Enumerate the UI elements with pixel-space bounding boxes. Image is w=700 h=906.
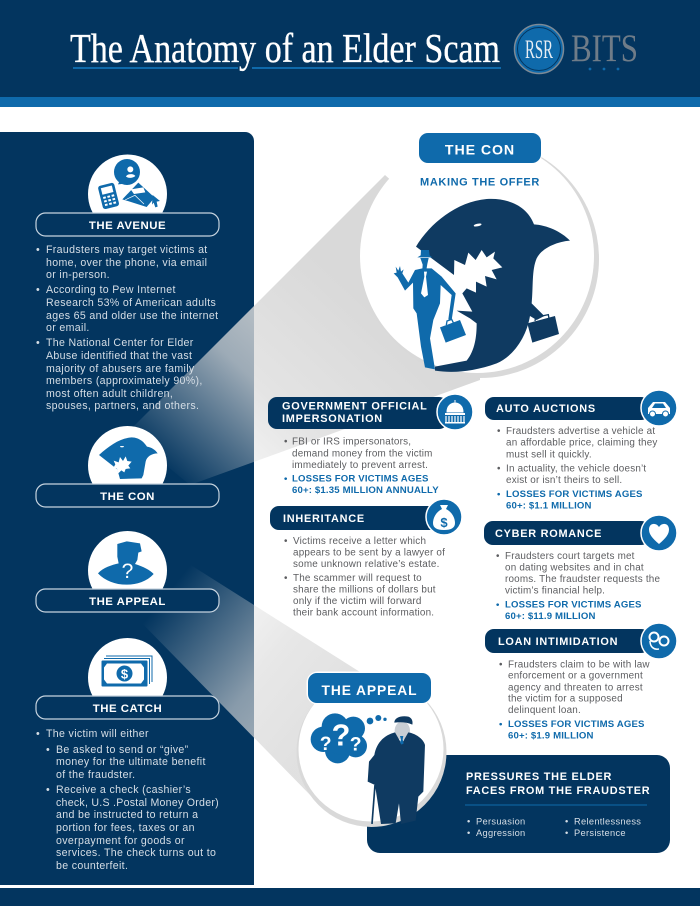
text: appears to be sent by a lawyer of [293, 548, 445, 558]
text: immediately to prevent arrest. [292, 460, 428, 471]
pill: the catch: THE CATCH [93, 703, 162, 715]
pill: the appeal: THE APPEAL [89, 596, 166, 608]
heading bar [270, 506, 440, 530]
text: Victims receive a letter which [293, 536, 426, 547]
icon: shark [88, 426, 167, 505]
subheading: MAKING THE OFFER [420, 176, 540, 188]
heading bar [268, 397, 448, 429]
text: • [496, 551, 500, 562]
text [284, 436, 439, 496]
heading bar [484, 521, 650, 545]
logo [514, 24, 638, 74]
text: avenue bullets: Abuse identified that the vast [46, 350, 192, 362]
pill: the con: THE CON [100, 491, 155, 503]
list [467, 816, 641, 838]
text: catch bullets: The victim will either [46, 728, 149, 740]
text: Fraudsters court targets met [505, 551, 635, 562]
heading bar: INHERITANCE [283, 513, 365, 525]
text: some unknown relative’s estate. [293, 559, 440, 570]
heading bar: LOAN INTIMIDATION [498, 636, 618, 648]
icon: money [88, 638, 167, 717]
heading bar: AUTO AUCTIONS [496, 403, 596, 415]
text: • [499, 719, 503, 730]
text: • [497, 489, 501, 500]
circle frame [360, 139, 599, 378]
text: avenue bullets: or email. [46, 322, 90, 334]
text: FBI or IRS impersonators, [292, 436, 411, 448]
heading bar: CYBER ROMANCE [495, 528, 602, 540]
text: • [284, 573, 288, 584]
heading bar [485, 629, 650, 653]
circle frame [296, 676, 446, 827]
text: 60+: $1.35 MILLION ANNUALLY [292, 485, 439, 496]
text [496, 551, 660, 622]
text: • [496, 600, 500, 610]
text [497, 426, 658, 512]
illustration: elder with thought cloud: ? [350, 735, 362, 756]
logo: BITS [571, 27, 638, 70]
left panel [0, 132, 254, 885]
card: auto auctions [485, 390, 677, 512]
illustration: elder with thought cloud: ? [332, 718, 350, 752]
icon: money: $ [121, 666, 129, 682]
logo: RSR [525, 35, 553, 64]
text: The scammer will request to [293, 573, 422, 584]
illustration: elder with thought cloud: ? [320, 734, 332, 755]
section: the appeal marker [36, 531, 219, 612]
text: LOSSES FOR VICTIMS AGES [508, 719, 645, 730]
heading [466, 771, 650, 797]
text: only if the victim will forward [293, 596, 422, 607]
icon: hidden figure: ? [122, 560, 133, 583]
text: 60+: $1.1 MILLION [506, 500, 592, 512]
text: avenue bullets: majority of abusers are family [46, 363, 195, 375]
text: avenue bullets: most often adult children, [46, 388, 173, 400]
text: share the millions of dollars but [293, 584, 436, 596]
list: • [467, 816, 471, 826]
text: their bank account information. [293, 608, 434, 618]
footer band [0, 888, 700, 906]
text: catch bullets: • [46, 784, 50, 796]
text: demand money from the victim [292, 448, 433, 460]
text: catch bullets: and be instructed to return a [56, 809, 198, 821]
text: • [284, 436, 288, 448]
text: • [284, 536, 288, 547]
icon: car [641, 390, 677, 426]
text: must sell it quickly. [506, 450, 592, 460]
list: Relentlessness [574, 816, 641, 826]
text: catch bullets: portion for fees, taxes or an [56, 822, 195, 834]
text: catch bullets: check, U.S .Postal Money Order) [56, 797, 219, 809]
text: agency and threaten to arrest [508, 682, 643, 694]
pill: the con [36, 484, 219, 507]
section: the con marker [36, 426, 219, 507]
text: In actuality, the vehicle doesn’t [506, 464, 646, 474]
text: delinquent loan. [508, 705, 581, 716]
text: avenue bullets: The National Center for Elder [46, 337, 194, 349]
card: inheritance [270, 499, 462, 618]
list: • [467, 828, 471, 838]
text: catch bullets: of the fraudster. [56, 769, 135, 781]
pill: the con heading [418, 132, 542, 164]
text: Fraudsters advertise a vehicle at [506, 426, 655, 437]
text: avenue bullets: Fraudsters may target victims at [46, 244, 208, 256]
beam: the con [127, 175, 480, 485]
icon: money bag [426, 499, 462, 535]
heading: FACES FROM THE FRAUDSTER [466, 785, 650, 797]
text: catch bullets: Be asked to send or “give” [56, 744, 189, 756]
text: an affordable price, claiming they [506, 438, 658, 448]
text: • [284, 474, 288, 484]
text: LOSSES FOR VICTIMS AGES [505, 600, 642, 610]
panel: the appeal illustration [296, 672, 446, 827]
icon: heart [641, 515, 677, 551]
title: The Anatomy of an Elder Scam [70, 25, 500, 71]
text: LOSSES FOR VICTIMS AGES [292, 474, 429, 484]
text: avenue bullets: According to Pew Internet [46, 284, 176, 296]
pill: the catch [36, 696, 219, 719]
panel: the con illustration [360, 132, 599, 378]
illustration: shark shadow and con man [394, 199, 570, 372]
text [499, 660, 650, 742]
text: catch bullets: • [46, 744, 50, 756]
heading bar: IMPERSONATION [282, 413, 383, 425]
text: 60+: $1.9 MILLION [508, 730, 594, 742]
text: avenue bullets: • [36, 337, 40, 349]
text [284, 536, 445, 618]
pill: the avenue: THE AVENUE [89, 220, 166, 232]
icon: handcuffs [641, 623, 677, 659]
beam: the appeal [132, 550, 370, 800]
text: avenue bullets: • [36, 284, 40, 296]
text: avenue bullets: Research 53% of American adults [46, 297, 216, 309]
text: the victim for a supposed [508, 694, 623, 704]
list: Persuasion [476, 816, 526, 826]
text: catch bullets: money for the ultimate benefit [56, 756, 206, 768]
list: • [565, 816, 569, 826]
list: Persistence [574, 828, 626, 838]
text: avenue bullets: home, over the phone, via email [46, 257, 207, 269]
icon: hidden figure [88, 531, 167, 610]
text: avenue bullets: spouses, partners, and others. [46, 400, 199, 412]
illustration: elder with thought cloud [311, 713, 425, 824]
panel: pressures [367, 755, 670, 853]
text: LOSSES FOR VICTIMS AGES [506, 489, 643, 500]
text: avenue bullets: • [36, 244, 40, 256]
card: cyber romance [484, 515, 677, 622]
pill: the con heading: THE CON [445, 142, 515, 158]
text: rooms. The fraudster requests the [505, 574, 660, 585]
text: exist or isn’t theirs to sell. [506, 475, 622, 486]
text: • [499, 660, 503, 670]
icon: avenue [88, 154, 167, 234]
text: avenue bullets: ages 65 and older use the internet [46, 310, 218, 322]
icon: money bag: $ [440, 515, 448, 530]
heading bar [485, 397, 650, 420]
pill: the appeal [36, 589, 219, 612]
pill: the avenue [36, 213, 219, 236]
pill: the appeal heading [306, 672, 432, 704]
text: • [497, 464, 501, 474]
text: avenue bullets: or in-person. [46, 269, 110, 281]
text: catch bullets [36, 728, 219, 872]
text: catch bullets: be counterfeit. [56, 860, 128, 872]
text: avenue bullets: members (approximately 90%), [46, 375, 203, 387]
text: catch bullets: services. The check turns out to [56, 847, 216, 859]
section: the catch [36, 638, 219, 872]
text: catch bullets: Receive a check (cashier’s [56, 784, 191, 796]
icon: capitol [437, 394, 473, 430]
text: catch bullets: • [36, 728, 40, 740]
text: on dating websites and in chat [505, 562, 644, 574]
pill: the appeal heading: THE APPEAL [322, 683, 417, 698]
text: avenue bullets [36, 244, 218, 412]
heading bar: GOVERNMENT OFFICIAL [282, 400, 428, 412]
text: 60+: $11.9 MILLION [505, 611, 596, 622]
text: catch bullets: overpayment for goods or [56, 835, 185, 847]
heading: PRESSURES THE ELDER [466, 771, 612, 783]
header band [0, 0, 700, 107]
card: loan intimidation [485, 623, 677, 742]
text: enforcement or a government [508, 670, 643, 682]
list: • [565, 828, 569, 838]
text: Fraudsters claim to be with law [508, 660, 650, 670]
section: the avenue [36, 154, 219, 412]
list: Aggression [476, 828, 526, 838]
text: • [497, 426, 501, 437]
text: victim’s financial help. [505, 586, 605, 596]
card: government official impersonation [268, 394, 473, 496]
